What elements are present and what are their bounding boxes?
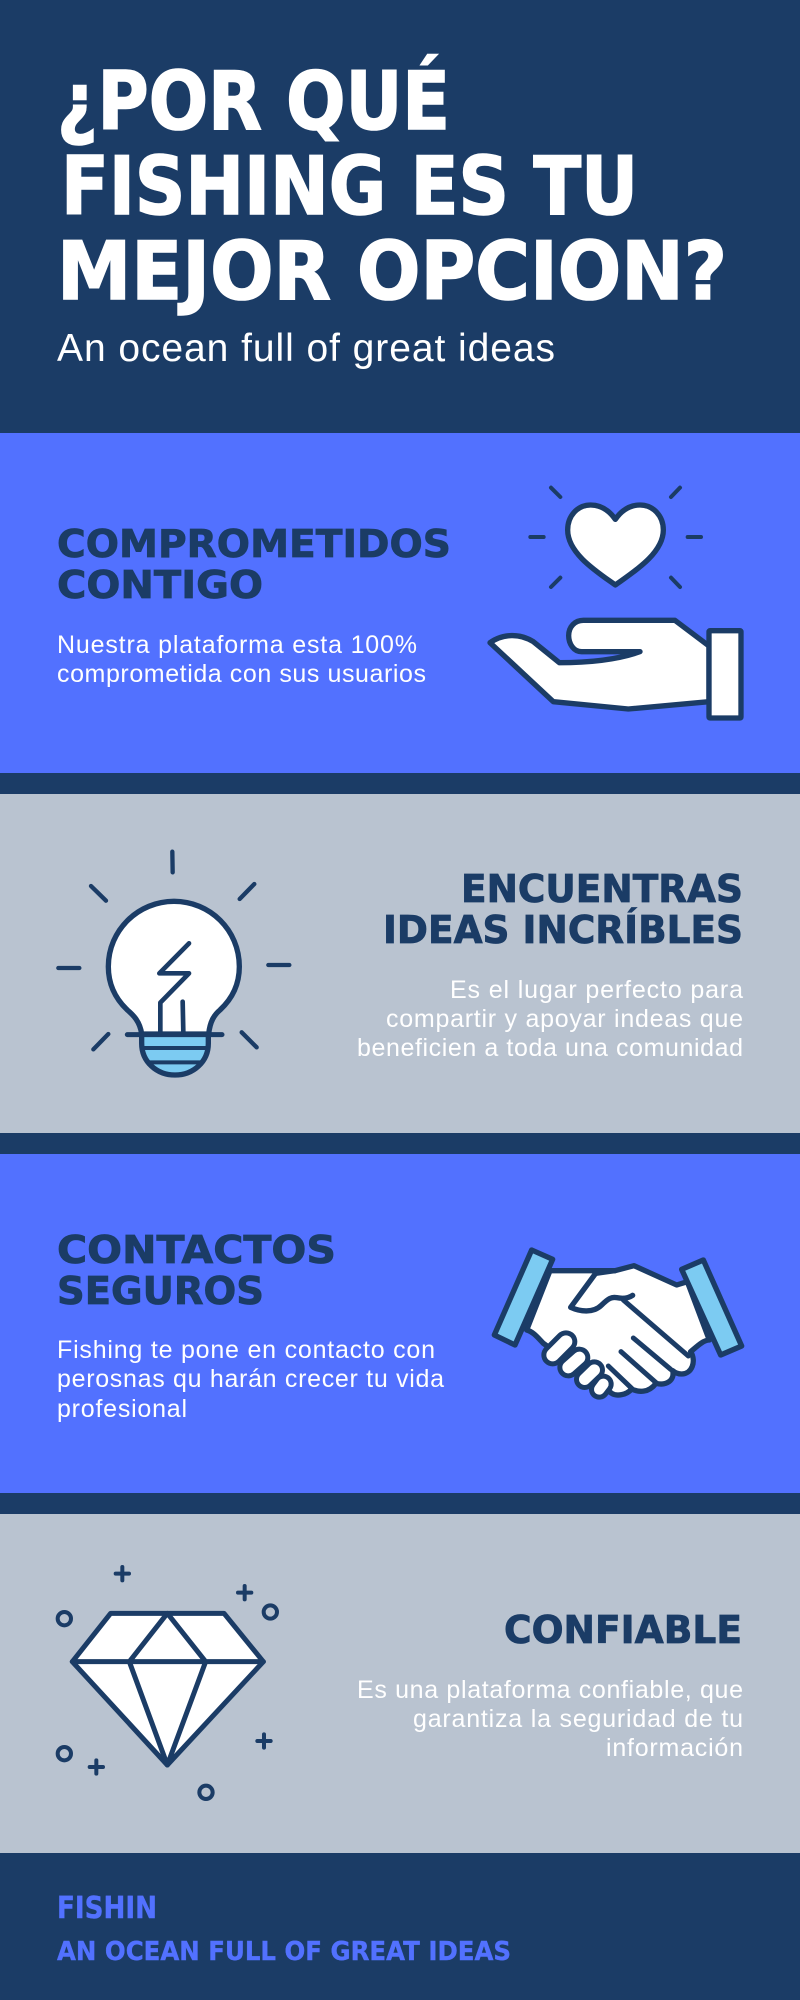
body text: compartir y apoyar indeas que [386,1005,743,1033]
icon: light bulb [58,852,289,1075]
panel: header [0,0,800,433]
heading: CONFIABLE [504,1608,742,1653]
body text: Es el lugar perfecto para [450,976,743,1004]
heading [57,522,451,608]
body text [57,631,426,688]
body text: perosnas qu harán crecer tu vida [57,1365,444,1393]
heading: CONTACTOS [57,1228,336,1273]
panel: contactos seguros [0,1154,800,1493]
heading: IDEAS INCRÍBLES [383,906,743,953]
subtitle: An ocean full of great ideas [57,327,555,370]
title [57,54,727,318]
panel: footer [0,1853,800,2000]
body text: información [606,1734,743,1762]
heading [383,867,743,953]
body text [357,1676,743,1762]
icon: handshake [494,1250,742,1395]
heading [57,1228,336,1314]
title: MEJOR OPCION? [57,225,727,318]
heading: SEGUROS [57,1269,264,1314]
title: ¿POR QUÉ [57,54,450,148]
footer brand: FISHIN [57,1891,157,1926]
panel: encuentras ideas increíbles [0,794,800,1133]
footer tagline: AN OCEAN FULL OF GREAT IDEAS [57,1937,511,1967]
fingers [553,1342,603,1389]
panel: confiable [0,1514,800,1853]
body text [57,1336,444,1423]
body text: garantiza la seguridad de tu [413,1705,743,1733]
body text: profesional [57,1395,187,1423]
icon: diamond [58,1567,277,1799]
heading: CONTIGO [57,563,263,608]
heading: COMPROMETIDOS [57,522,451,567]
body text: Nuestra plataforma esta 100% [57,631,417,659]
title: FISHING ES TU [61,140,638,233]
icon: heart in hand [490,488,741,718]
body text: Es una plataforma confiable, que [357,1676,743,1704]
body text: beneficien a toda una comunidad [357,1034,743,1062]
body text: comprometida con sus usuarios [57,660,426,688]
cuffs [494,1250,742,1355]
heading: ENCUENTRAS [461,867,743,912]
body text: Fishing te pone en contacto con [57,1336,435,1364]
body text [357,976,743,1062]
panel: comprometidos contigo [0,433,800,773]
